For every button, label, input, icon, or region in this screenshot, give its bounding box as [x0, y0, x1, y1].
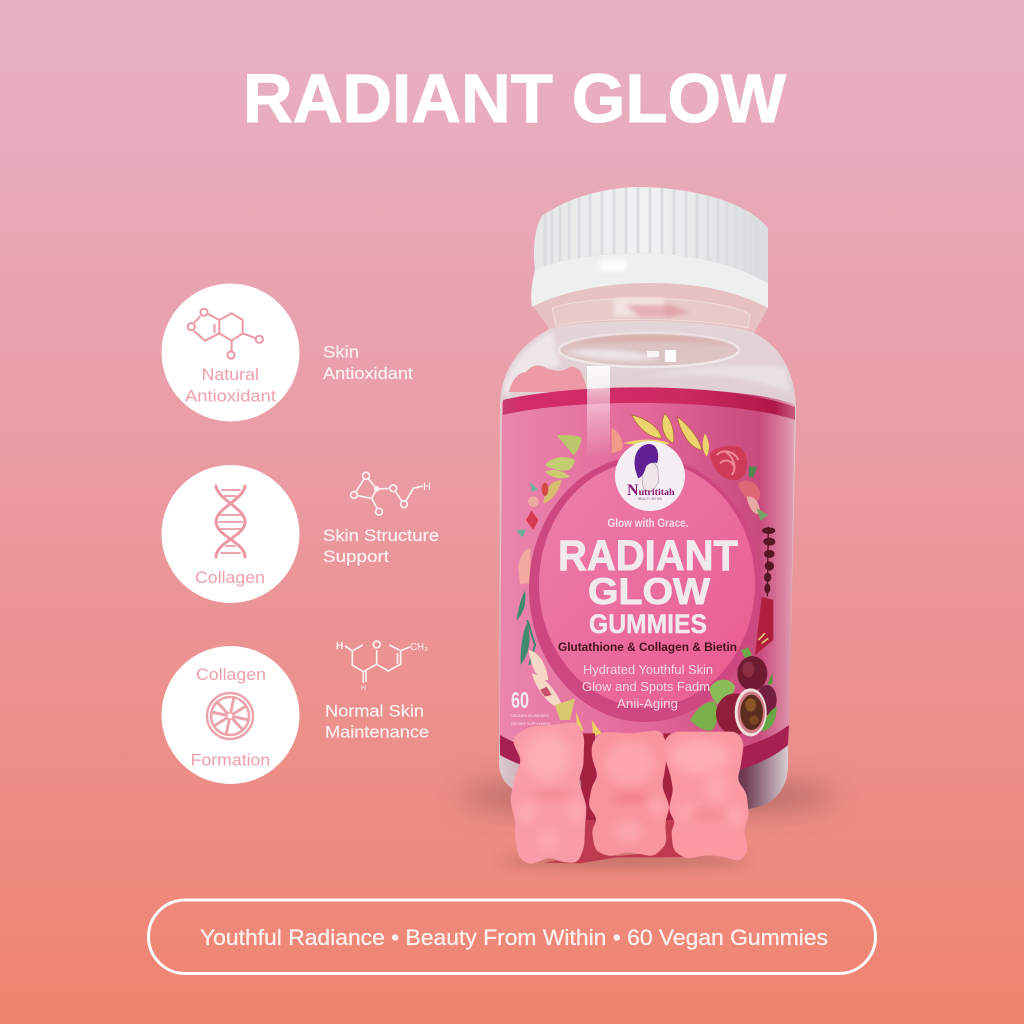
cap shine — [600, 260, 626, 271]
badge: collagen — [162, 465, 300, 603]
benefit text: Maintenance — [325, 723, 429, 742]
panel: benefit 3 — [162, 641, 429, 784]
left foliage — [516, 435, 602, 737]
label claims: Anii-Aging — [617, 696, 678, 711]
label bottom band — [500, 725, 789, 784]
badge text: Natural — [202, 365, 259, 384]
benefit text: Antioxidant — [323, 364, 413, 383]
icon: antioxidant molecule — [188, 309, 263, 359]
top gold leaves and flowers — [612, 413, 768, 521]
icon: white chain molecule — [336, 641, 428, 692]
cap ribbed top — [534, 187, 768, 283]
icon: white molecule: H — [423, 481, 431, 493]
bottom banner — [148, 900, 876, 974]
gummy inside bottle — [509, 365, 587, 392]
lower bottle base — [499, 725, 788, 809]
logo hair — [634, 444, 658, 478]
label product name line 1: RADIANT — [558, 532, 738, 580]
gummy bear 3 — [666, 733, 747, 860]
label small print: DIETARY SUPPLEMENT — [511, 721, 551, 726]
icon: white chain molecule: CH₃ — [410, 642, 428, 653]
cap skirt — [531, 253, 768, 308]
label count: 60 — [511, 687, 529, 713]
bottle cap — [531, 180, 768, 308]
bottle body glass — [499, 321, 796, 809]
benefit text: Skin — [323, 343, 359, 362]
badge text: Antioxidant — [185, 387, 276, 406]
cap ribs — [544, 187, 758, 266]
label disc — [529, 456, 761, 722]
product bottle — [499, 180, 796, 809]
logo wordmark: Nutrititah — [627, 482, 675, 499]
label product name line 2: GLOW — [588, 571, 710, 612]
label small print: VEGAN GUMMIES — [511, 713, 549, 718]
bottle neck — [532, 282, 768, 345]
icon: white chain molecule: H — [361, 685, 366, 692]
benefit text: Skin Structure — [323, 526, 439, 545]
dark gaps between bears — [581, 733, 675, 827]
label claims: Hydrated Youthful Skin — [583, 662, 713, 677]
logo small print: BEAUTY WITHIN — [638, 497, 662, 501]
label tagline: Glow with Grace. — [608, 518, 688, 530]
icon: citrus slice — [207, 693, 253, 739]
gummy bears — [512, 723, 747, 863]
benefit text: Support — [323, 547, 389, 566]
sugared red base between bears — [543, 820, 707, 863]
gummy bear 2 — [590, 732, 668, 855]
panel: benefit 2 — [162, 465, 439, 603]
ground shadow: bottle — [458, 782, 838, 810]
neck highlights — [552, 298, 750, 328]
benefit text: Normal Skin — [325, 702, 424, 721]
label ingredients: Glutathione & Collagen & Bietin — [558, 642, 737, 654]
badge text top: Collagen — [196, 665, 266, 684]
ground shadow: gummies — [500, 854, 750, 866]
bottle glare — [587, 366, 610, 458]
title: RADIANT GLOW — [243, 60, 787, 137]
panel: benefit 1 — [162, 284, 413, 422]
label top band — [503, 387, 795, 420]
icon: dna helix — [216, 486, 245, 557]
banner pill — [148, 900, 876, 974]
badge: natural antioxidant — [162, 284, 300, 422]
brand logo — [615, 441, 685, 511]
shoulder highlights — [503, 332, 790, 395]
right dark foliage — [755, 527, 775, 655]
badge: collagen formation — [162, 646, 300, 784]
logo face — [642, 462, 659, 491]
banner text: Youthful Radiance • Beauty From Within • 60 Vegan Gummies — [200, 925, 828, 950]
label product name line 3: GUMMIES — [589, 609, 707, 639]
icon: white molecule — [351, 472, 431, 515]
label claims: Glow and Spots Fadm — [582, 679, 710, 694]
disc inner — [539, 461, 755, 707]
badge text bottom: Formation — [191, 751, 270, 770]
gummy bear 1 — [512, 723, 585, 863]
label — [500, 389, 795, 759]
icon: white chain molecule: H — [336, 641, 343, 652]
illustration: passion fruit — [690, 647, 777, 736]
badge text: Collagen — [195, 568, 265, 587]
